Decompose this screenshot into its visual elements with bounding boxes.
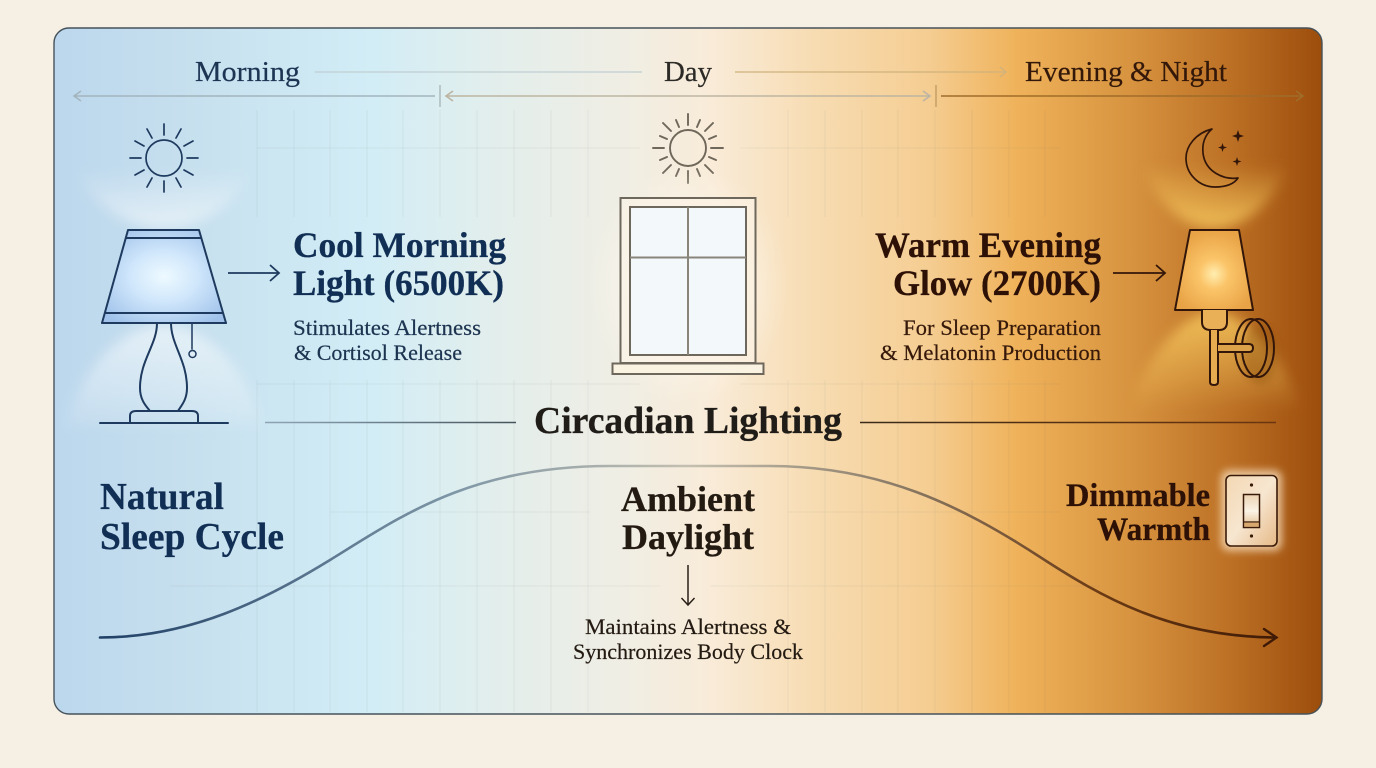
glow: morning lamp <box>66 170 262 425</box>
text block: dimmable warmth <box>1066 478 1210 548</box>
arrow: evening span <box>941 91 1303 101</box>
arrow: day span <box>446 91 930 101</box>
description: For Sleep Preparation <box>903 315 1101 340</box>
heading: Cool Morning <box>293 225 506 265</box>
arrow: morning span <box>74 91 435 101</box>
text block: warm evening glow <box>875 225 1101 365</box>
arrow: down <box>682 565 694 605</box>
icon: moon and stars <box>1186 129 1244 187</box>
arrow: lamp to cool morning <box>228 265 279 281</box>
divider right <box>860 422 1276 424</box>
glow: sconce <box>1130 165 1300 410</box>
description: Maintains Alertness & <box>585 614 791 639</box>
description line 2: & Melatonin Production <box>880 340 1101 365</box>
chart: natural sleep cycle curve <box>100 466 1276 646</box>
icon: dimmer switch <box>1221 470 1282 551</box>
icon: window <box>588 165 788 405</box>
description line 2: & Cortisol Release <box>294 340 462 365</box>
heading: Ambient <box>621 479 755 519</box>
label: Day: Day <box>664 57 712 88</box>
description: Stimulates Alertness <box>293 315 481 340</box>
label line 1: Dimmable <box>1066 478 1210 514</box>
label line 2: Sleep Cycle <box>100 516 284 558</box>
label: Evening & Night: Evening & Night <box>1025 57 1227 88</box>
label: Morning: Morning <box>195 57 300 88</box>
heading: Warm Evening <box>875 225 1101 265</box>
heading line 2: Daylight <box>622 517 754 557</box>
arrow: morning to day line <box>315 71 642 73</box>
arrow: warm text to sconce <box>1113 265 1165 281</box>
timeline header: periods <box>74 57 1303 107</box>
icon: day sun <box>653 114 723 183</box>
icon: morning sun <box>130 124 198 192</box>
description line 2: Synchronizes Body Clock <box>573 639 803 664</box>
text block: cool morning light <box>293 225 506 365</box>
arrow: day to evening <box>735 67 1006 77</box>
heading line 2: Glow (2700K) <box>893 263 1101 303</box>
label line 2: Warmth <box>1097 512 1210 548</box>
tick: day/evening <box>935 85 937 107</box>
text block: natural sleep cycle <box>100 476 284 558</box>
text block: ambient daylight <box>573 479 803 664</box>
label line 1: Natural <box>100 476 224 518</box>
shadow: sconce plate <box>1242 324 1278 384</box>
icon: table lamp <box>100 230 228 423</box>
icon: wall sconce <box>1175 230 1274 385</box>
heading line 2: Light (6500K) <box>293 263 504 303</box>
divider left <box>265 422 516 424</box>
title: Circadian Lighting <box>534 400 842 442</box>
tick: morning/day <box>439 85 441 107</box>
